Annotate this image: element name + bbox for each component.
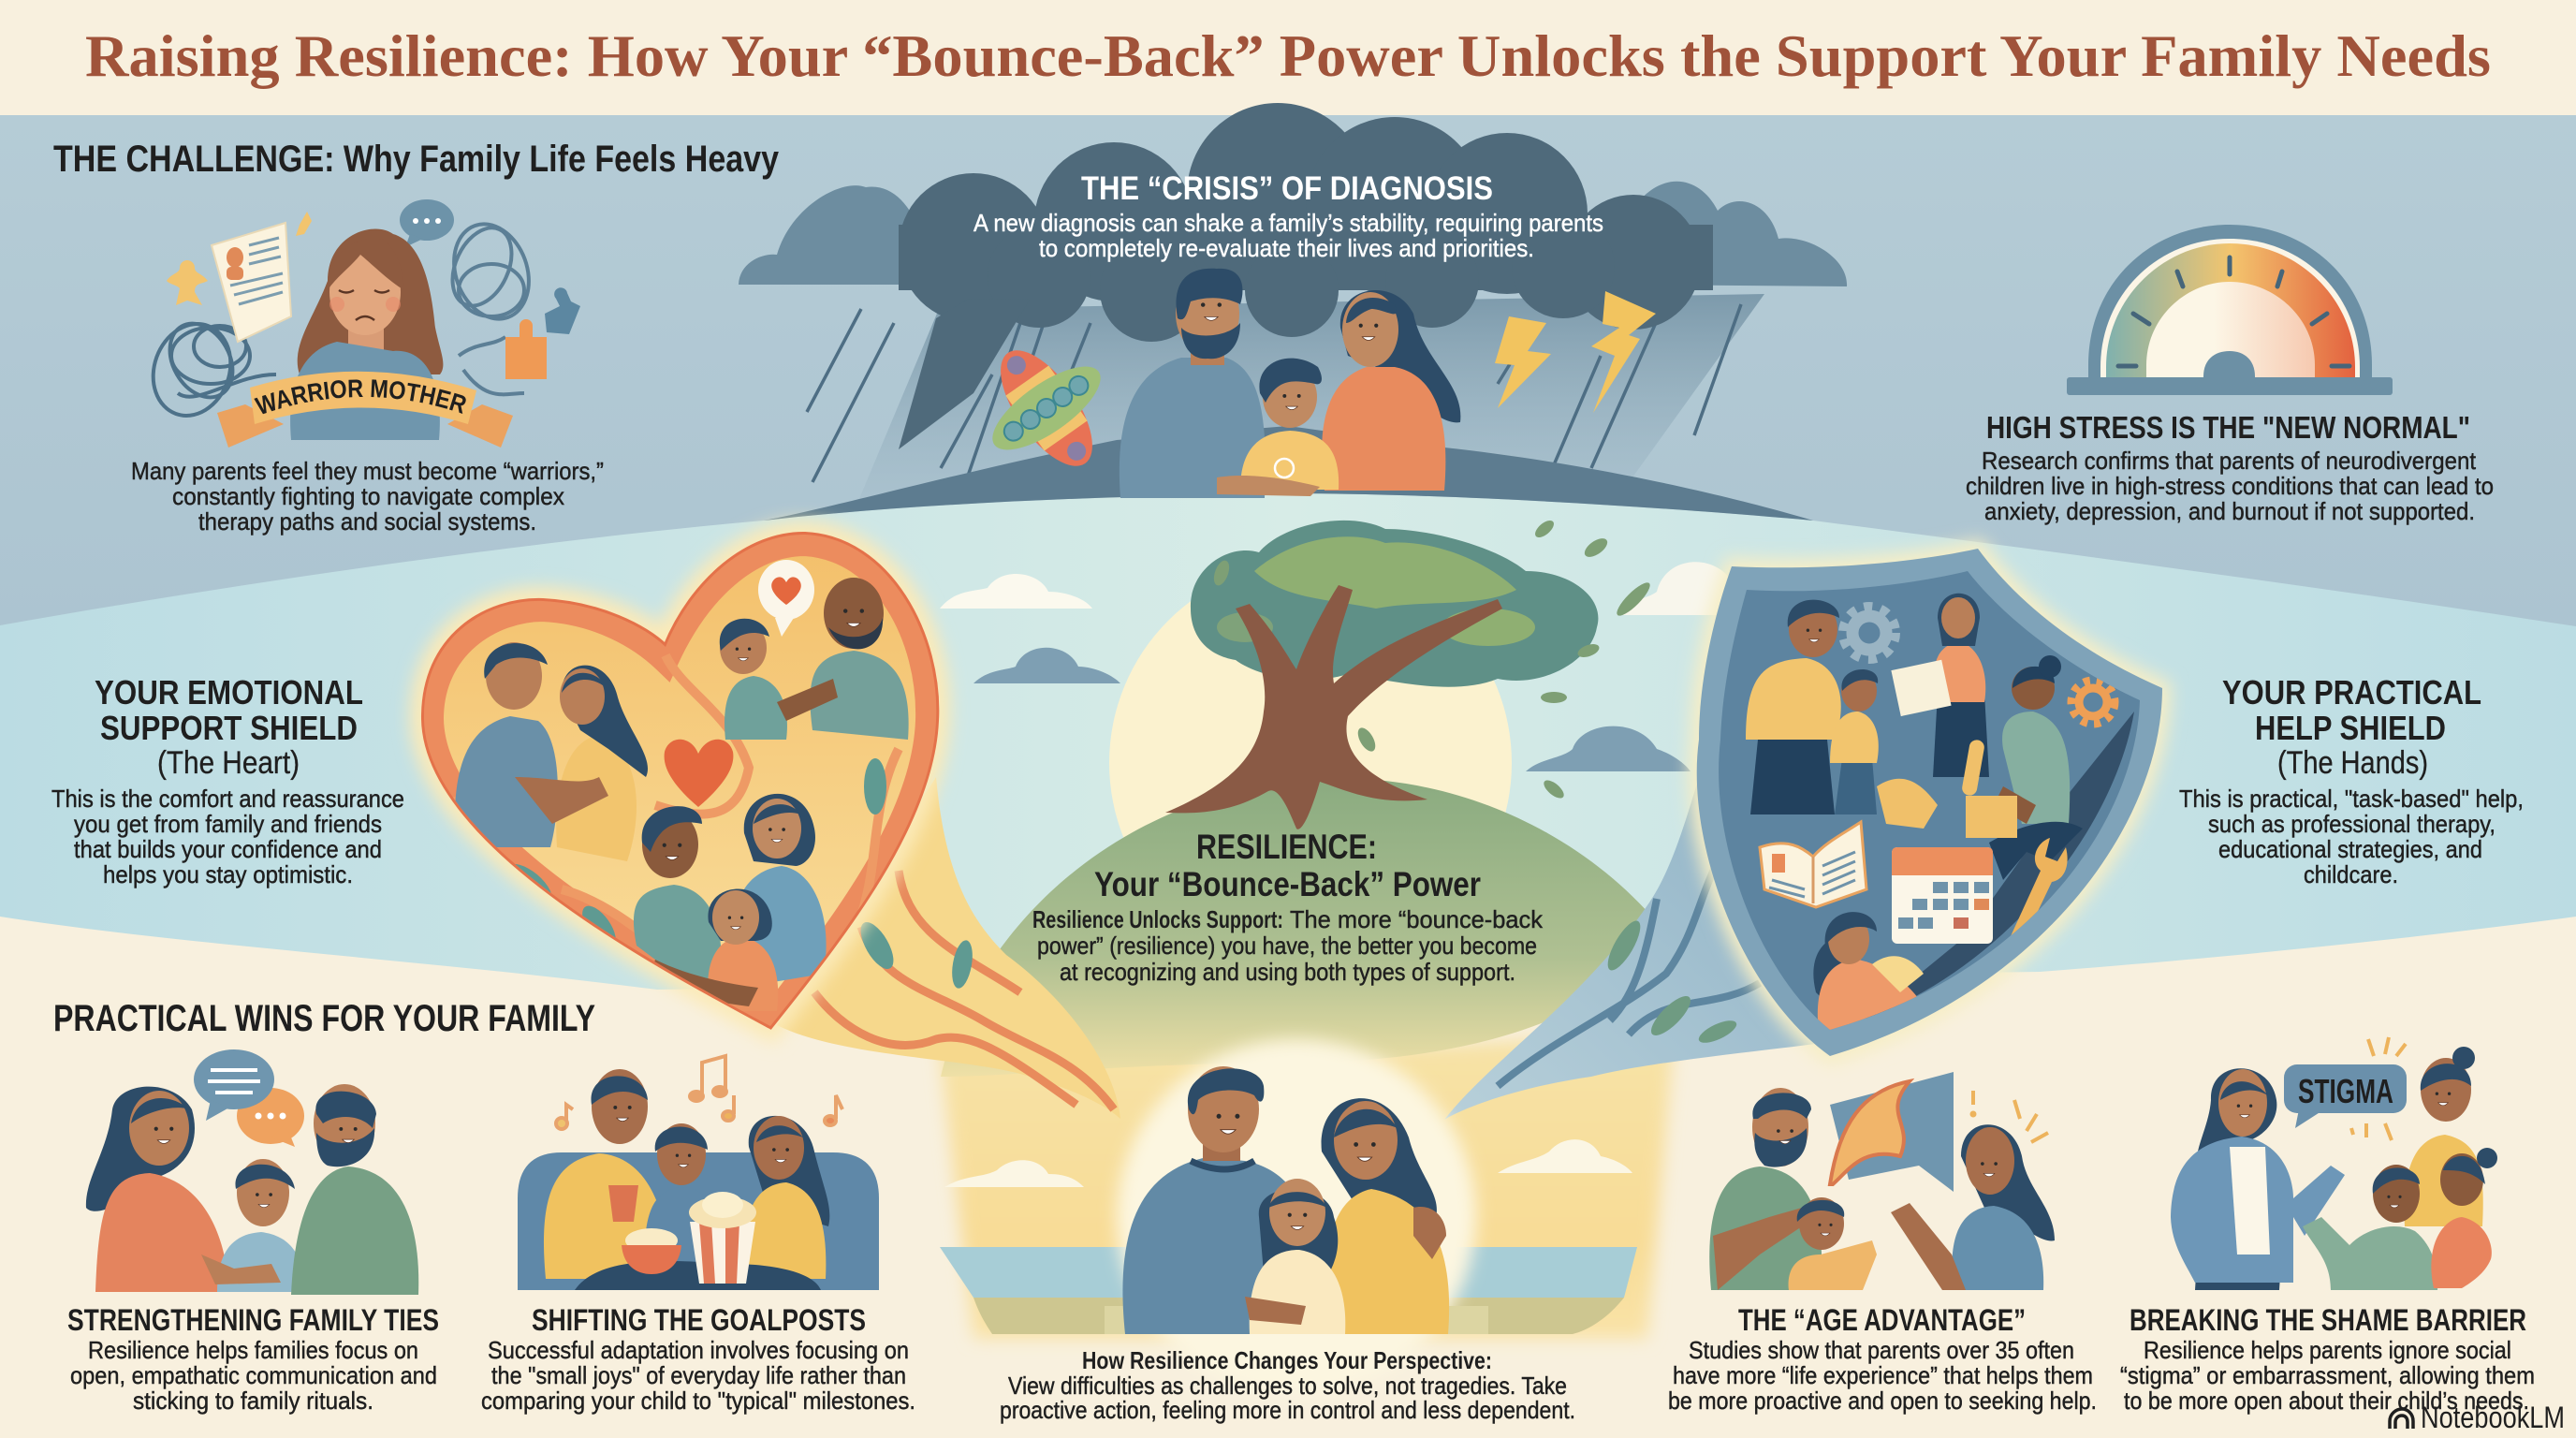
icon: tangled scribble left — [140, 313, 276, 427]
text: emotional support shield: SUPPORT SHIELD — [100, 709, 358, 747]
tree canopy — [1191, 521, 1598, 687]
text: warrior parents — [131, 457, 604, 536]
text: high stress — [1966, 410, 2494, 525]
child in green — [2303, 1165, 2437, 1290]
central yellow sunset panel — [936, 1020, 1676, 1339]
daughter — [1245, 1179, 1345, 1334]
icon: document — [212, 223, 291, 342]
text: high stress: children live in high-stress conditions that can lead to — [1966, 472, 2494, 500]
text: age advantage — [1668, 1303, 2097, 1415]
text: how resilience changes your perspective: proactive action, feeling more in control and less dependent. — [1000, 1396, 1575, 1424]
text: resilience: Resilience Unlocks Support: — [1032, 905, 1283, 933]
illustration: wind-swept tree — [1165, 518, 1654, 829]
text: high stress: Research confirms that parents of neurodivergent — [1982, 447, 2477, 475]
text: age advantage: Studies show that parents over 35 often — [1689, 1336, 2074, 1364]
shield ribbon flowing to centre — [1444, 777, 1816, 1120]
legs — [575, 1261, 821, 1290]
couple in heart — [455, 642, 648, 861]
text: warrior parents: Many parents feel they must become “warriors,” — [131, 457, 604, 485]
text: practical help shield: such as professional therapy, — [2208, 810, 2496, 838]
banner: warrior mother ribbon — [217, 371, 513, 448]
icon: wrench — [2011, 838, 2068, 941]
text: resilience: RESILIENCE: — [1196, 828, 1377, 866]
child — [217, 1159, 304, 1292]
tree trunk and roots — [1165, 585, 1502, 829]
icon: small clouds — [940, 562, 1748, 771]
person: mother — [290, 228, 443, 440]
text: crisis of diagnosis — [973, 170, 1603, 262]
music notes — [556, 1056, 842, 1129]
exclamation — [1971, 1091, 2048, 1142]
banner: warrior mother ribbon: WARRIOR MOTHER — [254, 379, 466, 414]
text: practical help shield: (The Hands) — [2277, 745, 2428, 781]
text: warrior parents: therapy paths and social systems. — [198, 507, 536, 536]
illustration: warrior mother — [152, 199, 580, 448]
person: father — [1120, 269, 1266, 498]
heart glow — [424, 535, 936, 1026]
map panel — [1830, 1072, 1954, 1192]
text: resilience: The more “bounce-back — [1290, 905, 1544, 933]
family in heart — [634, 794, 827, 1011]
person: woman reading — [1813, 912, 1928, 1030]
icon: fidget toy — [956, 316, 1137, 500]
person: child in storm — [1217, 359, 1339, 496]
shield glow — [1697, 549, 2162, 1056]
illustration: breaking the shame barrier — [2171, 1037, 2497, 1290]
clouds — [944, 1139, 1632, 1187]
heading: practical wins: PRACTICAL WINS FOR YOUR FAMILY — [53, 998, 595, 1039]
text: crisis of diagnosis: to completely re-evaluate their lives and priorities. — [1039, 234, 1534, 262]
text: practical help shield: educational strategies, and — [2218, 835, 2482, 863]
text: crisis of diagnosis: THE “CRISIS” OF DIAGNOSIS — [1081, 170, 1493, 207]
man — [201, 1084, 418, 1295]
text: practical help shield: HELP SHIELD — [2255, 709, 2446, 747]
text: emotional support shield: you get from family and friends — [74, 810, 382, 838]
heart: emotional support shield — [424, 535, 936, 1026]
icon: yellow tools — [1877, 739, 2017, 838]
girl in orange — [2431, 1148, 2497, 1288]
sun glow — [1109, 562, 1512, 964]
text: practical help shield: childcare. — [2304, 860, 2398, 888]
text: emotional support shield: that builds your confidence and — [74, 835, 382, 863]
icon: open book — [1760, 822, 1866, 907]
person: woman with box — [1891, 594, 1989, 777]
person: man with child — [1746, 600, 1879, 814]
sofa — [518, 1152, 879, 1290]
icon: tangled scribble right — [441, 213, 541, 394]
storm cloud — [899, 103, 1713, 449]
text: how resilience changes your perspective: View difficulties as challenges to solve, not tragedies. Take — [1008, 1372, 1567, 1400]
text: warrior parents: constantly fighting to navigate complex — [172, 482, 564, 510]
person: mother in storm — [1322, 290, 1460, 491]
icon: popcorn bowl — [622, 1228, 681, 1274]
text: emotional support shield: YOUR EMOTIONAL — [95, 673, 363, 712]
woman — [86, 1087, 229, 1292]
stigma speech bubble — [2284, 1064, 2407, 1128]
rain column — [858, 294, 1764, 501]
text: resilience: Your “Bounce-Back” Power — [1094, 865, 1481, 903]
illustration: strengthening family ties — [86, 1049, 418, 1295]
icon: puzzle pieces — [167, 212, 580, 379]
text: breaking the shame barrier: “stigma” or embarrassment, allowing them — [2120, 1361, 2535, 1389]
icon: centre heart — [665, 740, 733, 807]
storm light clouds — [739, 182, 1847, 286]
text: high stress: anxiety, depression, and burnout if not supported. — [1984, 497, 2475, 525]
shield: practical help — [1697, 549, 2162, 1056]
text: resilience — [1032, 828, 1544, 986]
green hill — [941, 778, 1657, 1077]
illustration: central family at the shore — [940, 1039, 1637, 1395]
icon: speech bubble — [400, 199, 454, 247]
flying leaves — [1211, 518, 1654, 801]
woman — [742, 1116, 829, 1279]
text: high stress: HIGH STRESS IS THE "NEW NORMAL" — [1986, 410, 2470, 445]
text: emotional support shield: This is the comfort and reassurance — [51, 785, 404, 813]
man — [1709, 1088, 1822, 1290]
icon: gear orange — [2071, 681, 2115, 724]
text: resilience: power” (resilience) you have, the better you become — [1037, 932, 1537, 960]
text: strengthening family ties — [67, 1303, 439, 1415]
icon: stress gauge — [2067, 225, 2393, 395]
sea — [940, 1247, 1637, 1298]
illustration: shifting the goalposts — [518, 1056, 879, 1290]
icon: speech bubble heart — [758, 560, 814, 637]
text: breaking the shame barrier: to be more open about their child’s needs. — [2124, 1387, 2529, 1415]
text: shifting the goalposts — [481, 1303, 915, 1415]
icon: gear grey — [1843, 607, 1895, 659]
text: resilience: at recognizing and using both types of support. — [1060, 958, 1515, 986]
speaker woman — [2171, 1068, 2345, 1290]
text: practical help shield: This is practical, "task-based" help, — [2179, 785, 2524, 813]
text: crisis of diagnosis: A new diagnosis can shake a family’s stability, requiring parents — [973, 209, 1603, 237]
accent marks — [2351, 1037, 2406, 1140]
speech bubbles — [194, 1049, 304, 1147]
father — [1122, 1066, 1325, 1334]
man — [544, 1069, 669, 1279]
text: strengthening family ties: open, empathatic communication and — [70, 1361, 437, 1389]
text: shifting the goalposts: SHIFTING THE GOALPOSTS — [532, 1303, 866, 1337]
text: age advantage: have more “life experience” that helps them — [1673, 1361, 2093, 1389]
halo arch — [1117, 1039, 1476, 1395]
icon: lightning bolts — [1495, 291, 1656, 413]
person: kneeling woman — [1989, 655, 2083, 880]
text: emotional support shield: helps you stay optimistic. — [103, 860, 353, 888]
icon: popcorn bucket — [689, 1192, 756, 1284]
child — [1789, 1197, 1877, 1290]
text: emotional support shield: (The Heart) — [157, 745, 300, 781]
text: strengthening family ties: STRENGTHENING FAMILY TIES — [67, 1303, 439, 1337]
background: mint support band — [0, 493, 2576, 990]
text: shifting the goalposts: the "small joys" of everyday life rather than — [491, 1361, 906, 1389]
stigma speech bubble: STIGMA — [2298, 1072, 2393, 1110]
text: practical help shield — [2179, 673, 2524, 888]
dark hill — [764, 426, 1813, 521]
kid — [644, 1123, 723, 1279]
heading: the challenge: THE CHALLENGE: Why Family Life Feels Heavy — [53, 139, 780, 180]
illustration: the age advantage — [1709, 1072, 2055, 1290]
text: age advantage: THE “AGE ADVANTAGE” — [1738, 1303, 2026, 1337]
text: shifting the goalposts: comparing your child to "typical" milestones. — [481, 1387, 915, 1415]
text: shifting the goalposts: Successful adaptation involves focusing on — [488, 1336, 909, 1364]
text: breaking the shame barrier: Resilience helps parents ignore social — [2144, 1336, 2511, 1364]
text: how resilience changes your perspective: How Resilience Changes Your Perspective: — [1082, 1346, 1492, 1374]
text: breaking the shame barrier — [2120, 1303, 2535, 1415]
text: strengthening family ties: sticking to family rituals. — [133, 1387, 373, 1415]
title: Raising Resilience: How Your “Bounce-Back” Power Unlocks the Support Your Family Needs — [85, 22, 2491, 89]
icon: drink cup — [608, 1185, 638, 1222]
illustration: storm scene — [739, 103, 1847, 521]
sand — [973, 1298, 1624, 1334]
parent and child in heart — [720, 578, 909, 740]
text: emotional support shield — [51, 673, 404, 888]
heart ribbon flowing to centre — [777, 777, 1120, 1119]
background: sky band of the challenge section — [0, 115, 2576, 696]
second parent — [2404, 1047, 2483, 1226]
rain streaks — [807, 300, 1741, 487]
text: age advantage: be more proactive and open to seeking help. — [1668, 1387, 2097, 1415]
text: practical help shield: YOUR PRACTICAL — [2222, 673, 2481, 712]
text: how resilience changes your perspective — [1000, 1346, 1575, 1424]
mother — [1322, 1098, 1449, 1334]
icon: calendar — [1892, 847, 1993, 944]
woman — [1891, 1124, 2055, 1290]
text: strengthening family ties: Resilience helps families focus on — [88, 1336, 418, 1364]
